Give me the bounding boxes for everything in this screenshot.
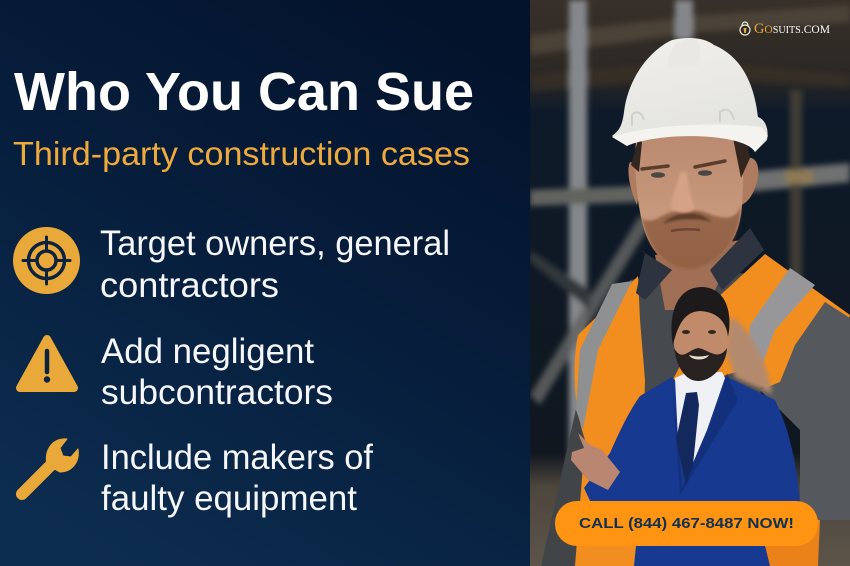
call to action button: CALL (844) 467-8487 NOW! [579, 516, 794, 532]
icon: logo padlock [740, 22, 750, 35]
shirt [630, 273, 761, 394]
nose [671, 172, 695, 213]
call to action button [555, 501, 818, 546]
vest left [574, 276, 645, 566]
jacket [584, 376, 800, 566]
tie [676, 392, 699, 485]
ears and hair [628, 158, 758, 206]
brows and eyes [642, 161, 725, 169]
list item: faulty equipment [22, 438, 373, 518]
hand [571, 433, 620, 490]
head [674, 311, 729, 366]
shirt [675, 372, 725, 470]
right sleeve [760, 302, 850, 520]
text: target owners: contractors [100, 266, 279, 305]
subtitle: Third-party construction cases [13, 135, 470, 172]
beard [674, 348, 727, 381]
scaffolding background [530, 0, 850, 566]
text: subcontractors: Add negligent [101, 332, 314, 371]
neck [655, 240, 740, 310]
white hard hat [612, 38, 768, 152]
panel: navy text panel [0, 0, 530, 566]
hair [672, 287, 730, 345]
list item: target owners [13, 224, 450, 305]
title: Who You Can Sue [14, 62, 474, 122]
lower vest right [765, 520, 820, 566]
icon: target [13, 227, 80, 294]
stubble beard [642, 205, 741, 269]
left sleeve [541, 408, 585, 566]
panel: construction photo [530, 0, 850, 566]
text: target owners: Target owners, general [100, 224, 450, 263]
vest right [670, 254, 850, 388]
icon: wrench [22, 439, 78, 494]
blurred raised fist [726, 317, 772, 394]
lapels [672, 373, 738, 495]
collar [636, 228, 764, 300]
text: faulty equipment: Include makers of [101, 438, 373, 477]
attorney [571, 287, 800, 566]
face [635, 132, 745, 269]
hair sides [631, 138, 750, 178]
moustache [663, 213, 712, 224]
icon: warning triangle [20, 339, 74, 388]
worker body and vest [541, 228, 850, 566]
logo [740, 21, 830, 37]
worker head [628, 132, 758, 269]
text: subcontractors: subcontractors [101, 373, 333, 412]
list item: subcontractors [20, 332, 333, 412]
text: faulty equipment: faulty equipment [101, 479, 357, 518]
logo wordmark: GOSUITS.COM [754, 21, 830, 37]
